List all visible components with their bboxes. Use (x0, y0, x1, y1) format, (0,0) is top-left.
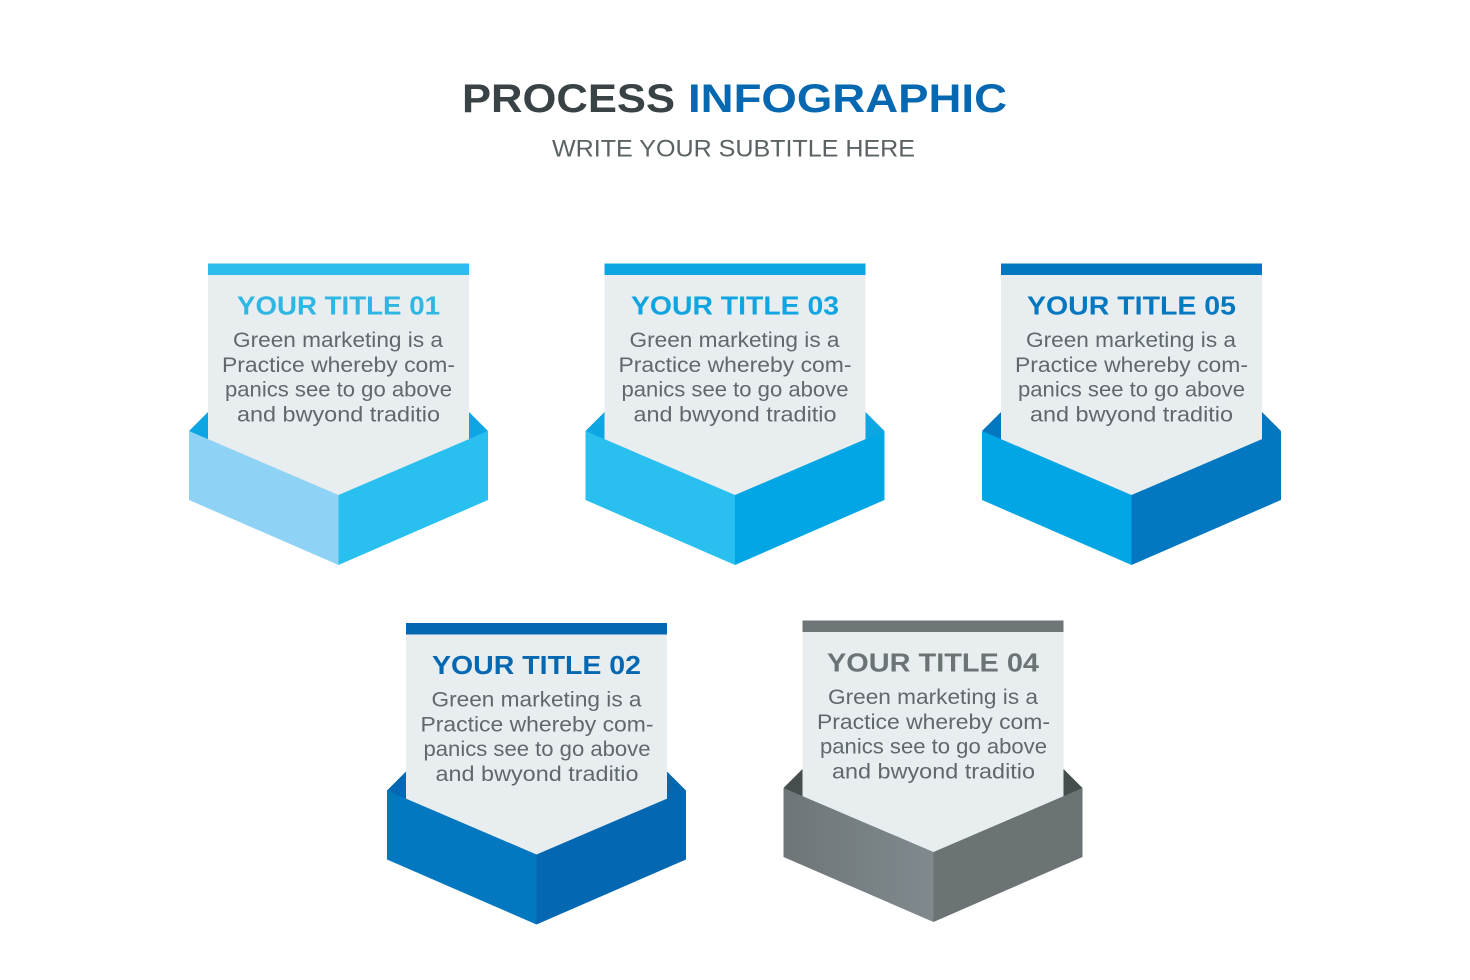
panel: your title 02 (387, 623, 686, 924)
subtitle: WRITE YOUR SUBTITLE HERE (552, 136, 915, 162)
body text 02: Practice whereby com- (420, 714, 654, 736)
body text 03: Practice whereby com- (618, 354, 852, 377)
sheet 04 (802, 621, 1064, 853)
panel: your title 03 (586, 264, 884, 565)
band right 05 (1132, 431, 1281, 565)
top bar 03 (604, 264, 866, 275)
panel: your title 05 (982, 264, 1281, 565)
body text 01: Green marketing is a (233, 329, 443, 352)
body text 04: panics see to go above (820, 736, 1047, 758)
heading 05: YOUR TITLE 05 (1027, 290, 1236, 320)
panel: your title 04 (784, 620, 1082, 922)
heading 01: YOUR TITLE 01 (237, 290, 440, 320)
body text 03: panics see to go above (622, 378, 848, 402)
heading 03: YOUR TITLE 03 (631, 290, 839, 320)
title: PROCESS (462, 77, 675, 121)
back flap 02 (387, 772, 686, 800)
back flap 01 (189, 412, 488, 441)
body text 02: Green marketing is a (432, 688, 642, 712)
heading 04: YOUR TITLE 04 (827, 648, 1040, 678)
title: INFOGRAPHIC (688, 77, 1007, 121)
body text 02: panics see to go above (424, 738, 650, 761)
band left 03 (586, 431, 735, 565)
body text 02 (420, 688, 654, 786)
sheet 03 (604, 264, 866, 496)
band right 01 (338, 431, 488, 565)
body text 04: Green marketing is a (828, 686, 1038, 709)
title (462, 77, 1007, 121)
body text 01: Practice whereby com- (222, 354, 455, 377)
band right 02 (536, 790, 686, 924)
body text 03: Green marketing is a (630, 329, 840, 352)
body text 01 (222, 329, 455, 426)
body text 03: and bwyond traditio (634, 404, 836, 426)
body text 05 (1015, 329, 1248, 426)
body text 04: and bwyond traditio (832, 760, 1035, 784)
back flap 05 (982, 412, 1281, 441)
heading 02: YOUR TITLE 02 (432, 650, 641, 680)
body text 01: and bwyond traditio (237, 404, 440, 426)
top bar 04 (802, 620, 1064, 632)
band right 03 (735, 431, 884, 565)
body text 02: and bwyond traditio (436, 763, 638, 786)
band left 02 (387, 790, 536, 924)
sheet 05 (1001, 264, 1262, 496)
body text 04 (817, 686, 1050, 784)
back flap 04 (784, 769, 1082, 798)
top bar 05 (1001, 264, 1262, 275)
band left 01 (189, 431, 338, 565)
back flap 03 (586, 412, 884, 441)
body text 05: Practice whereby com- (1015, 354, 1248, 377)
body text 05: Green marketing is a (1026, 329, 1236, 352)
sheet 01 (208, 264, 469, 496)
body text 04: Practice whereby com- (817, 711, 1050, 734)
top bar 01 (208, 264, 469, 275)
band left 05 (982, 431, 1132, 565)
body text 01: panics see to go above (225, 378, 452, 402)
top bar 02 (406, 623, 667, 634)
body text 05: and bwyond traditio (1030, 404, 1233, 426)
panel: your title 01 (189, 264, 488, 565)
band right 04 (934, 788, 1082, 922)
band left 04 (784, 788, 934, 922)
sheet 02 (406, 624, 667, 856)
body text 03 (618, 329, 852, 426)
body text 05: panics see to go above (1018, 378, 1245, 402)
